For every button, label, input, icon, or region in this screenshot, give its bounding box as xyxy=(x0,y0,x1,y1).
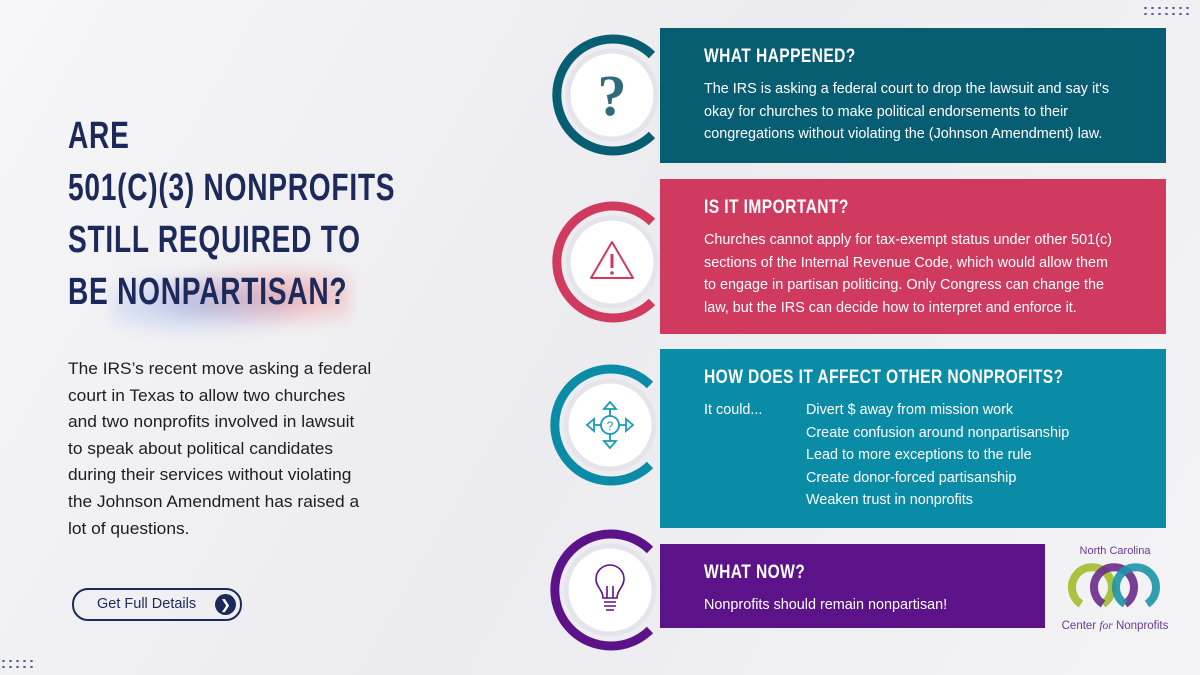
panel: is it important: law, but the IRS can decide how to interpret and enforce it. xyxy=(704,300,1077,316)
title xyxy=(68,115,395,313)
intro text: during their services without violating xyxy=(68,465,351,484)
panel: what happened: The IRS is asking a federal court to drop the lawsuit and say it's xyxy=(704,81,1109,97)
panel: how does it affect: Weaken trust in nonprofits xyxy=(806,492,973,508)
panel: how does it affect xyxy=(660,349,1166,528)
icon: warning xyxy=(557,206,656,318)
panel: is it important: to engage in partisan politicing. Only Congress can change the xyxy=(704,277,1104,293)
panel: how does it affect: Create confusion around nonpartisanship xyxy=(806,424,1069,440)
panel: is it important xyxy=(660,179,1166,334)
panel: how does it affect: It could... xyxy=(704,402,762,418)
intro text: lot of questions. xyxy=(68,519,189,538)
logo xyxy=(1062,545,1169,632)
icon: arrows xyxy=(555,369,654,481)
panel: is it important: Churches cannot apply for tax-exempt status under other 501(c) xyxy=(704,232,1112,248)
panel: is it important: sections of the Internal Revenue Code, which would allow them xyxy=(704,254,1108,270)
button: Get Full Details xyxy=(97,596,196,612)
panel: what happened: WHAT HAPPENED? xyxy=(704,46,856,67)
dots top right xyxy=(1142,5,1192,17)
intro text: to speak about political candidates xyxy=(68,439,333,458)
panel: is it important: IS IT IMPORTANT? xyxy=(704,197,849,218)
panel: what happened: okay for churches to make political endorsements to their xyxy=(704,104,1068,120)
intro text: the Johnson Amendment has raised a xyxy=(68,492,359,511)
panel: what now: Nonprofits should remain nonpartisan! xyxy=(704,597,947,613)
intro text: The IRS’s recent move asking a federal xyxy=(68,359,371,378)
panel: what happened: congregations without violating the (Johnson Amendment) law. xyxy=(704,126,1102,142)
panel: what now: WHAT NOW? xyxy=(704,562,805,583)
title: ARE xyxy=(68,115,130,157)
panel: how does it affect: HOW DOES IT AFFECT OTHER NONPROFITS? xyxy=(704,367,1064,388)
intro text: and two nonprofits involved in lawsuit xyxy=(68,412,354,431)
button: ❯ xyxy=(220,597,231,612)
panel: what happened xyxy=(660,28,1166,163)
intro text: court in Texas to allow two churches xyxy=(68,386,345,405)
icon: question xyxy=(557,39,656,151)
title: 501(C)(3) NONPROFITS xyxy=(68,167,395,209)
dots bottom left xyxy=(0,658,36,670)
logo: Center for Nonprofits xyxy=(1062,620,1169,632)
icon: bulb xyxy=(555,534,654,646)
panel: how does it affect: Lead to more exceptions to the rule xyxy=(806,447,1032,463)
logo: North Carolina xyxy=(1080,545,1151,557)
button xyxy=(72,588,242,621)
panel: what now xyxy=(660,544,1045,628)
panel: how does it affect: Create donor-forced partisanship xyxy=(806,470,1016,486)
title: BE NONPARTISAN? xyxy=(68,271,347,313)
decorative blur xyxy=(110,260,350,340)
icon: question: ? xyxy=(598,63,626,128)
title: STILL REQUIRED TO xyxy=(68,219,361,261)
panel: how does it affect: Divert $ away from mission work xyxy=(806,402,1013,418)
icon: arrows: ? xyxy=(607,419,614,433)
intro text xyxy=(68,359,371,538)
